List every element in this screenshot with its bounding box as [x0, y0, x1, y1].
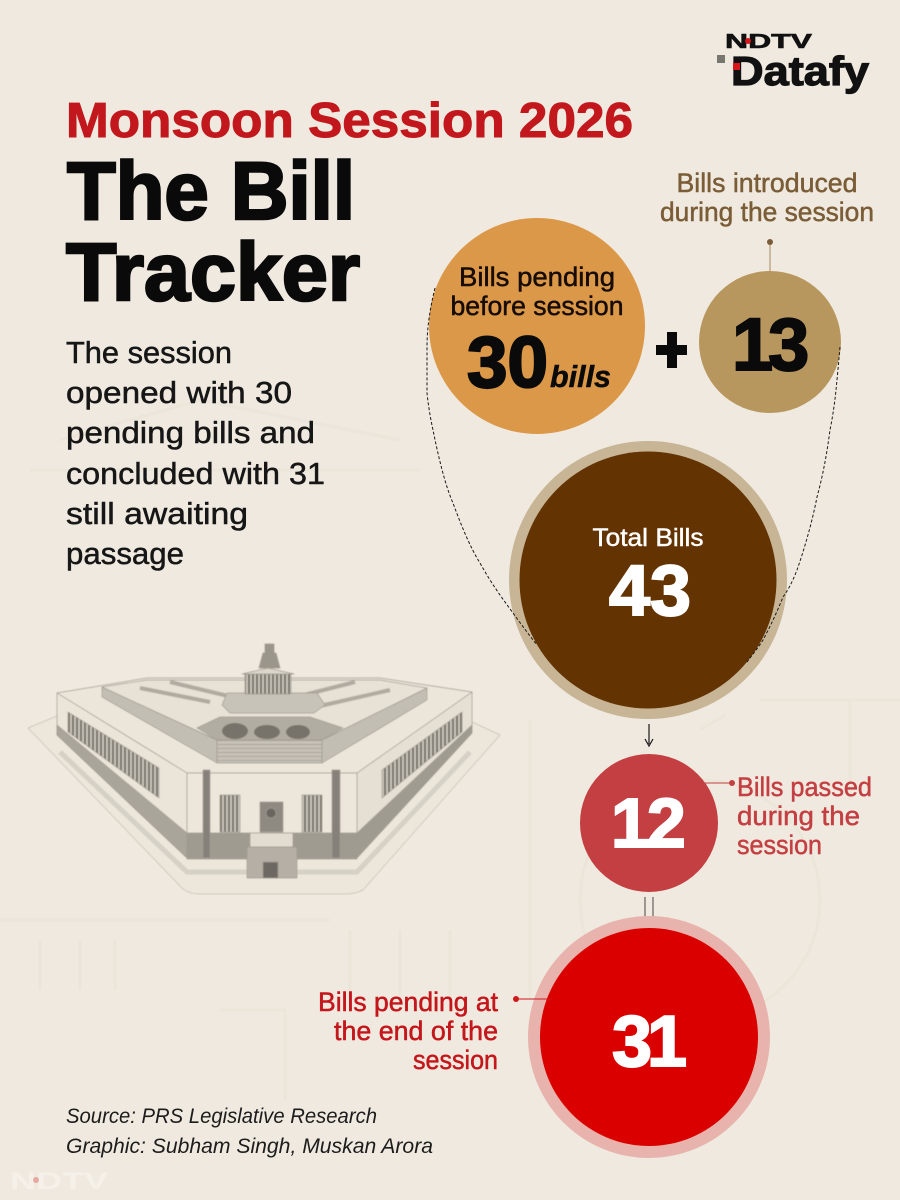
source and credit — [66, 1105, 433, 1158]
roof — [57, 678, 472, 773]
connector: bills pending at end — [513, 996, 552, 1002]
entrance steps — [250, 833, 293, 847]
left wing — [57, 693, 187, 858]
heading: The Bill Tracker — [66, 146, 360, 318]
label: bills passed: during the — [737, 801, 860, 831]
circle: bills introduced 13 — [699, 271, 841, 413]
plus sign — [656, 332, 687, 368]
circle: bills pending before session: bills — [550, 359, 611, 394]
arrow down — [645, 724, 653, 746]
heading: The Bill Tracker: Tracker — [66, 227, 360, 318]
equals connector — [645, 897, 653, 919]
watermark: NDTV: NDTV — [10, 1168, 108, 1195]
circle: bills introduced 13: 13 — [732, 303, 807, 386]
source and credit: Source: PRS Legislative Research — [66, 1105, 377, 1128]
illustration: parliament building — [28, 644, 500, 894]
connector: bills passed — [705, 780, 735, 786]
label: bills introduced — [660, 168, 874, 227]
label: bills introduced: during the session — [660, 197, 874, 227]
intro text: The session — [66, 335, 232, 370]
front facade — [187, 773, 357, 858]
circle: bills pending before session: before session — [450, 291, 624, 321]
label: bills passed — [737, 772, 872, 860]
inner well walls — [102, 687, 217, 763]
label: bills introduced: Bills introduced — [676, 168, 858, 198]
circle: bills pending at end 31 — [528, 916, 770, 1158]
logo: NDTV Datafy: NDTV — [725, 31, 813, 53]
circle: bills pending before session: 30 — [467, 323, 548, 403]
intro text: still awaiting — [66, 496, 248, 531]
intro text: passage — [66, 536, 184, 571]
label: bills pending at end — [318, 987, 498, 1075]
label: bills pending at end: the end of the — [334, 1016, 498, 1046]
faint background sketch — [0, 400, 900, 1100]
circle: bills pending before session — [429, 218, 645, 434]
ground plate — [28, 716, 500, 894]
tower — [259, 644, 280, 668]
heading: The Bill Tracker: The Bill — [67, 146, 355, 237]
circle: bills passed 12: 12 — [611, 784, 684, 862]
intro text: opened with 30 — [66, 375, 292, 410]
radial wings on roof — [140, 682, 390, 706]
circle: bills pending at end 31: 31 — [612, 1002, 686, 1082]
connector: bills introduced — [767, 239, 773, 280]
watermark: NDTV — [10, 1168, 108, 1195]
logo: NDTV Datafy — [717, 31, 869, 94]
circle: bills passed 12 — [580, 754, 718, 892]
logo: NDTV Datafy: Datafy — [731, 48, 869, 94]
right wing — [357, 692, 472, 858]
circle: bills pending before session: Bills pending — [459, 262, 615, 292]
source and credit: Graphic: Subham Singh, Muskan Arora — [66, 1135, 433, 1158]
circle: total bills 43: 43 — [609, 552, 691, 631]
circle: total bills 43: Total Bills — [592, 524, 704, 552]
circle: total bills 43 — [509, 441, 787, 719]
trees — [222, 723, 310, 739]
central hall — [222, 693, 325, 713]
label: bills passed: session — [737, 830, 822, 860]
label: bills pending at end: session — [413, 1045, 498, 1075]
intro text: pending bills and — [66, 415, 315, 450]
intro text: concluded with 31 — [66, 456, 325, 491]
intro text — [66, 335, 325, 571]
label: bills passed: Bills passed — [737, 772, 872, 802]
tree pit — [197, 717, 343, 740]
label: bills pending at end: Bills pending at — [318, 987, 498, 1017]
dashed connector lines — [427, 288, 840, 662]
inner roof floor — [102, 680, 427, 740]
title: Monsoon Session 2026: Monsoon Session 2026 — [66, 94, 633, 148]
